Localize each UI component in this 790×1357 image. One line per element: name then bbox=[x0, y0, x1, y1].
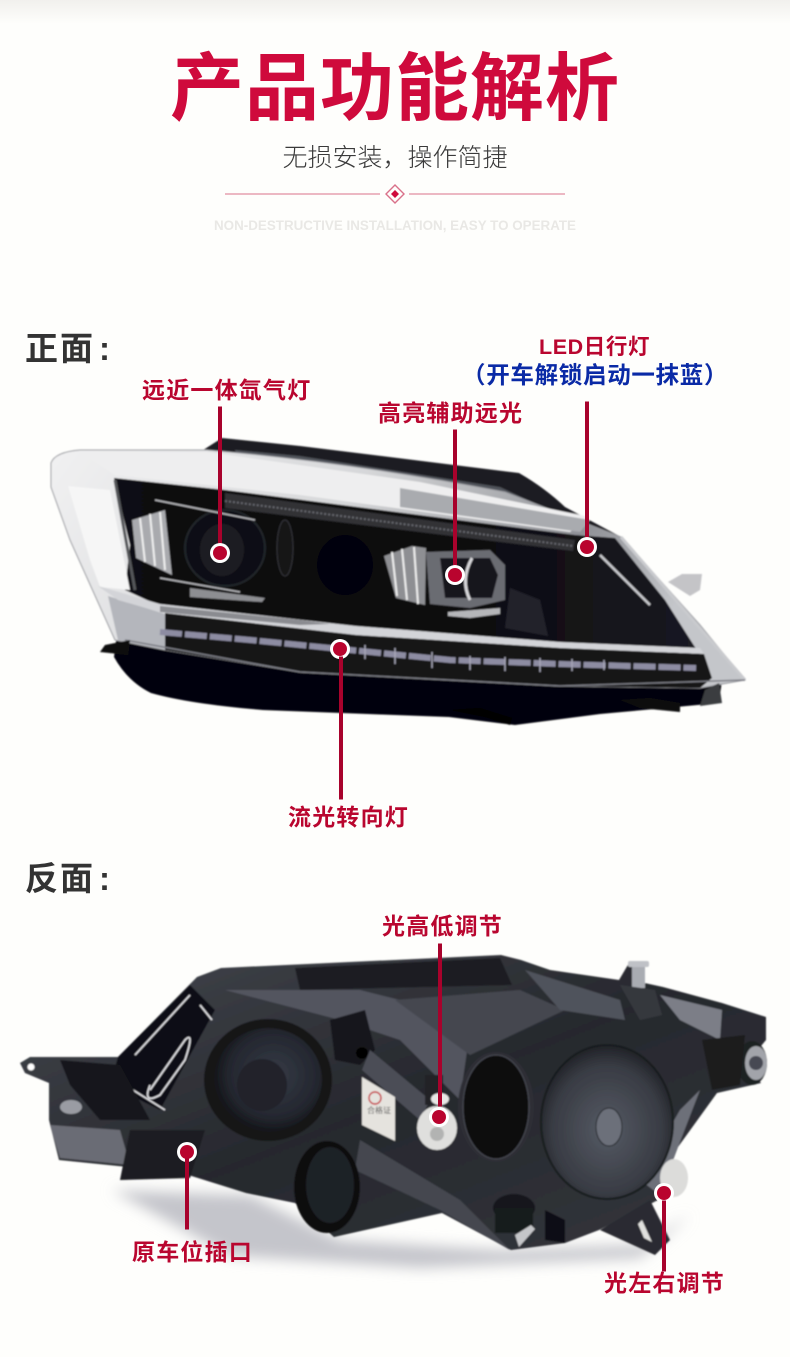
headlight: rear view bbox=[20, 955, 767, 1268]
round connector bbox=[737, 1041, 767, 1085]
callout: beam height adjuster bbox=[382, 913, 503, 1127]
header bbox=[170, 47, 620, 233]
side lower face bbox=[355, 1140, 510, 1250]
low beam lens bbox=[185, 510, 265, 586]
translucent lower-left lens bbox=[108, 596, 168, 650]
cross element bbox=[277, 520, 293, 576]
subtitle: 无损安装，操作简捷 bbox=[282, 144, 508, 172]
lower small cap bbox=[294, 1141, 360, 1233]
left side reflector bbox=[68, 486, 130, 590]
section heading: rear: 反面: bbox=[25, 860, 112, 897]
side bracket bbox=[668, 574, 702, 596]
sweeping LED row bbox=[160, 632, 696, 668]
white adjuster high-low bbox=[425, 1075, 443, 1105]
callout: original car socket bbox=[132, 1142, 253, 1265]
label sticker bbox=[362, 1077, 395, 1141]
english tagline: NON-DESTRUCTIVE INSTALLATION, EASY TO OPERATE bbox=[214, 218, 576, 233]
white adjuster left-right bbox=[660, 1159, 688, 1197]
DRL dark strip bbox=[225, 493, 575, 551]
headlight: front view bbox=[51, 438, 745, 725]
callout: sweeping turn signal: 流光转向灯 bbox=[288, 804, 409, 830]
callout: low and high beam xenon bbox=[142, 377, 311, 563]
callout: auxiliary high beam: 高亮辅助远光 bbox=[378, 400, 523, 426]
LED dark row bbox=[165, 613, 712, 688]
left bracket with white lines bbox=[110, 985, 215, 1110]
mounting clips bbox=[450, 708, 512, 725]
callout: beam left-right adjuster: 光左右调节 bbox=[604, 1270, 725, 1296]
callout: auxiliary high beam bbox=[378, 400, 523, 585]
ground shadow bbox=[112, 1190, 690, 1268]
dark interior bbox=[114, 478, 700, 655]
callout: beam height adjuster: 光高低调节 bbox=[382, 913, 503, 939]
black cube bracket bbox=[330, 1010, 375, 1065]
callout: LED daytime running light bbox=[462, 335, 728, 557]
title: 产品功能解析 bbox=[170, 47, 620, 130]
callout: original car socket: 原车位插口 bbox=[132, 1239, 253, 1265]
high beam fins bbox=[384, 546, 426, 605]
headlight: rear view: 合格证 bbox=[367, 1105, 391, 1115]
chrome strip bbox=[98, 586, 704, 654]
callout: LED daytime running light: （开车解锁启动一抹蓝） bbox=[462, 362, 728, 388]
low beam fins bbox=[132, 510, 172, 575]
oval hole bbox=[458, 1052, 534, 1162]
left large cap bbox=[204, 1019, 332, 1141]
section heading: front: 正面: bbox=[25, 330, 112, 367]
outer lens bbox=[51, 450, 745, 688]
high beam module bbox=[426, 550, 505, 608]
lower bolt bbox=[493, 1194, 535, 1222]
right inner glow bbox=[505, 588, 548, 636]
lower black body bbox=[114, 610, 722, 725]
callout: low and high beam xenon: 远近一体氙气灯 bbox=[142, 377, 311, 403]
divider with diamond bbox=[225, 185, 565, 203]
top face lighter bbox=[225, 990, 470, 1100]
bottom lens rim bbox=[125, 640, 745, 686]
adjuster stem bbox=[632, 963, 645, 988]
body silhouette bbox=[20, 955, 766, 1250]
white band under lens top bbox=[80, 452, 590, 532]
right large cap bbox=[541, 1045, 673, 1199]
callout: LED daytime running light: LED日行灯 bbox=[539, 335, 650, 359]
callout: beam left-right adjuster bbox=[604, 1183, 725, 1296]
callout: sweeping turn signal bbox=[288, 639, 409, 830]
rear housing bbox=[200, 438, 621, 537]
